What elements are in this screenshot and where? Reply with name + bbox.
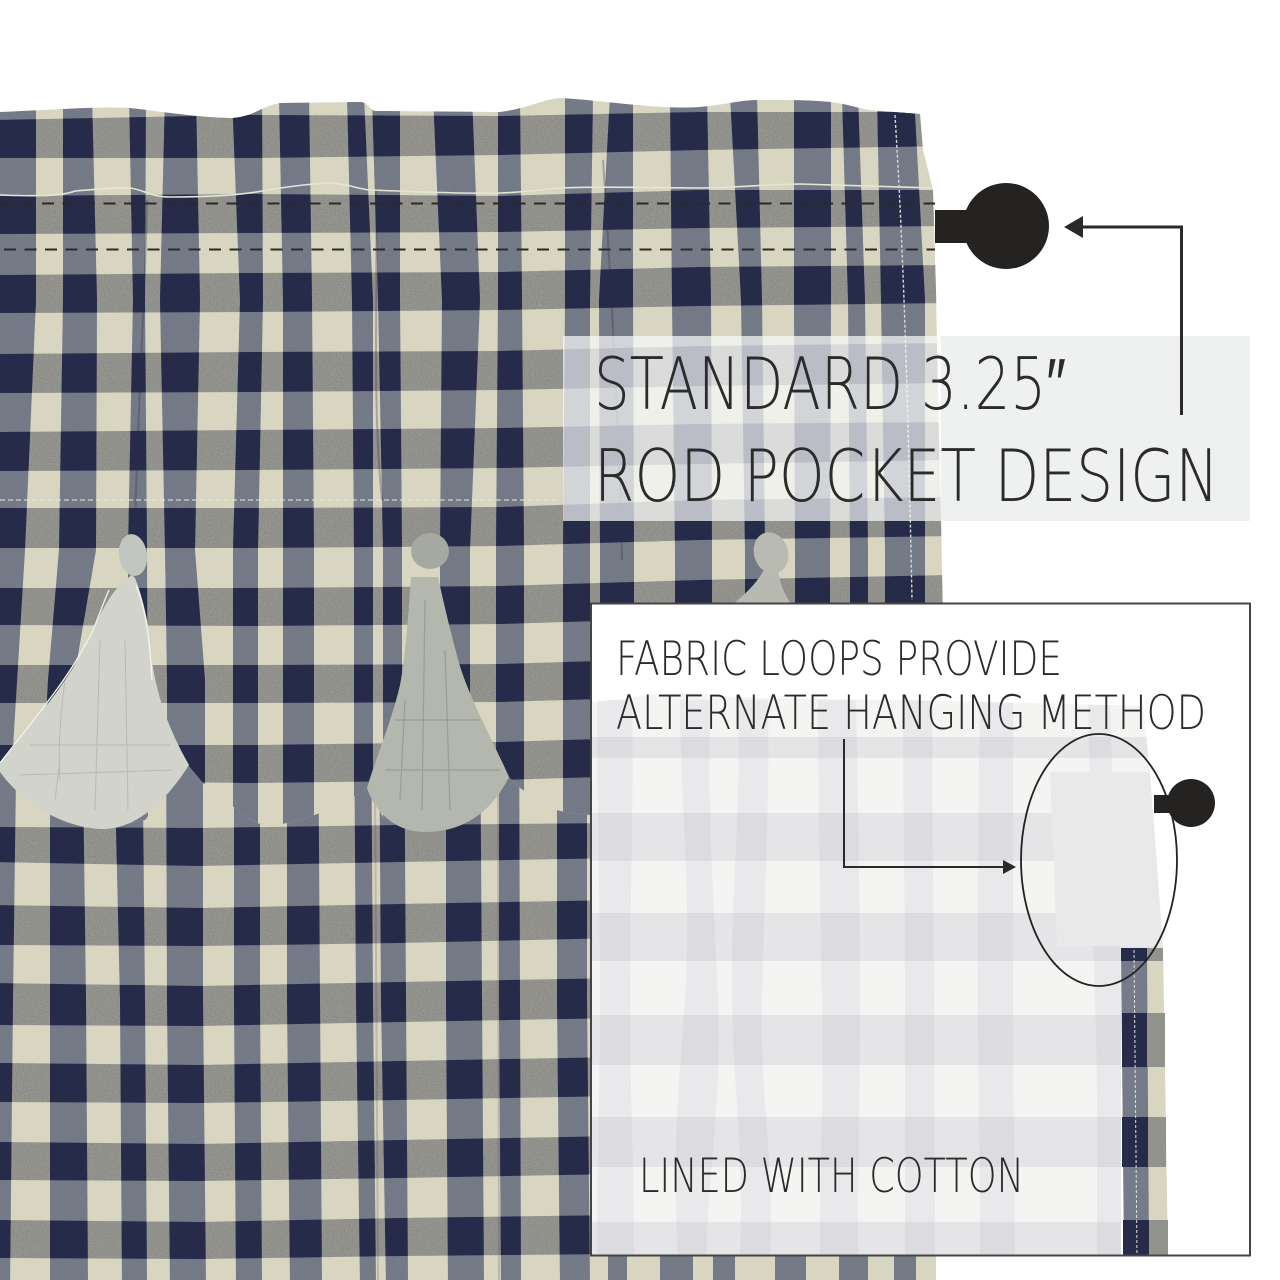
heading: standard rod pocket — [594, 342, 1219, 518]
panel heading: fabric loops — [616, 632, 1206, 741]
curtain photo: gingham fabric — [0, 90, 955, 1280]
panel frame — [591, 604, 1250, 1256]
heading: standard rod pocket: STANDARD 3.25″ — [594, 342, 1066, 426]
callout banner — [563, 336, 1250, 521]
lining flap right — [730, 570, 792, 606]
arrow to rod — [1064, 216, 1182, 415]
fabric edge strip — [1121, 948, 1168, 1256]
rod pocket dashed lines — [1, 204, 935, 250]
icon: curtain rod end — [935, 183, 1049, 269]
button centre — [411, 533, 449, 569]
washed fabric lining — [590, 690, 1170, 1260]
arrow to loop — [844, 739, 1016, 874]
button left — [116, 532, 150, 578]
caption: lined with cotton: LINED WITH COTTON — [639, 1149, 1024, 1204]
icon: small rod end — [1154, 779, 1215, 827]
upper valance with scallops — [0, 98, 943, 832]
fabric loop blanked area — [1050, 772, 1163, 946]
button right — [748, 528, 794, 578]
lining flap left — [0, 575, 189, 829]
lower curtain panel — [0, 766, 936, 1280]
ellipse highlight — [1021, 734, 1177, 986]
lining flap centre — [367, 577, 509, 832]
panel heading: fabric loops: FABRIC LOOPS PROVIDE — [616, 632, 1062, 687]
inset panel — [590, 604, 1250, 1260]
